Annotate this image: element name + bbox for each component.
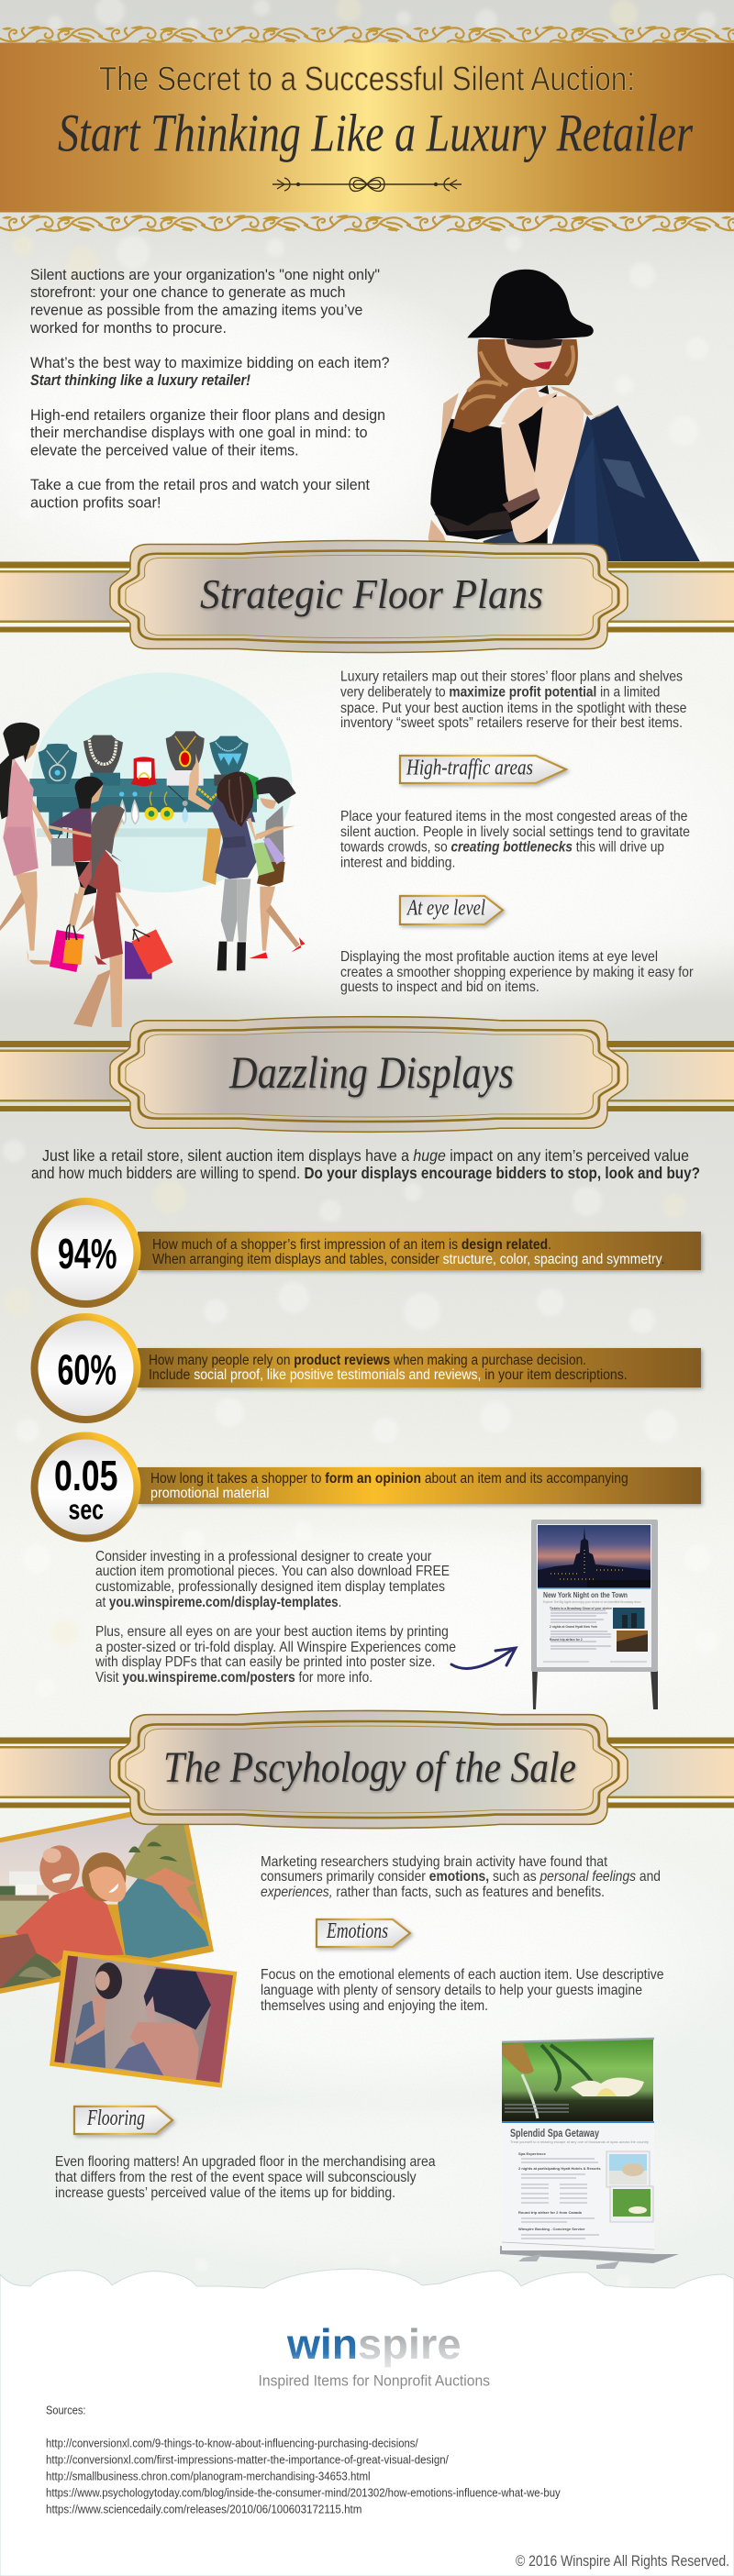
psychology paragraph 2: Focus on the emotional elements of each auction item. Use descriptive [261,1967,664,1983]
flooring paragraph [55,2154,436,2201]
stat: 94%: When arranging item displays and tables, consider structure, color, spacing and symmetry. [152,1252,664,1267]
stat: 60%: 60% [57,1346,117,1394]
retractable banner display: 2 nights at participating Hyatt Hotels & Resorts [518,2166,601,2171]
floor plan paragraph 1 [340,669,687,731]
sources: Sources: [46,2405,85,2417]
tag: High-traffic areas: High-traffic areas [406,756,533,779]
section banner: Strategic Floor Plans [0,541,734,653]
shopper with gray bag [49,777,104,926]
sources: http://smallbusiness.chron.com/planogram-merchandising-34653.html [46,2470,371,2482]
poster display sign [531,1520,658,1709]
arrow to poster [451,1648,516,1668]
banner photo: lotus and bamboo [502,2040,654,2122]
flooring paragraph: Even flooring matters! An upgraded floor in the merchandising area [55,2154,436,2170]
shopper in pink dress [0,723,53,965]
poster display sign: Round trip airfare for 2 [550,1638,583,1642]
intro text: Take a cue from the retail pros and watch your silent [30,476,370,493]
floor plan paragraph 3: creates a smoother shopping experience by making it easy for [340,965,694,980]
intro text: revenue as possible from the amazing items you’ve [30,301,362,318]
title line 1: The Secret to a Successful Silent Auction: [99,61,635,98]
floor plan paragraph 3: guests to inspect and bid on items. [340,979,539,995]
necklaces [47,750,69,764]
intro text: auction profits soar! [30,493,161,511]
intro text: their merchandise displays with one goal in mind: to [30,424,367,441]
retractable banner display: Splendid Spa Getaway [510,2128,599,2139]
sources: https://www.psychologytoday.com/blog/inside-the-consumer-mind/201302/how-emotions-influence-what-we-buy [46,2486,561,2499]
sources: http://conversionxl.com/9-things-to-know-about-influencing-purchasing-decisions/ [46,2437,418,2449]
stat: 0.05 sec: promotional material [150,1486,269,1501]
divider flourish [272,178,462,191]
logo: winspire [286,2320,461,2368]
floor plan paragraph 1: space. Put your best auction items in the spotlight with these [340,701,687,716]
teal circle backdrop [32,672,292,892]
floor plan paragraph 1: inventory “sweet spots” retailers reserve for their best items. [340,715,683,731]
poster display sign: 2 nights at Grand Hyatt New York [550,1625,597,1629]
intro text: Start thinking like a luxury retailer! [30,371,250,389]
intro text [29,266,390,511]
stat: 94% [31,1198,701,1308]
lower ornamental border [0,215,734,233]
psychology paragraph 2: language with plenty of sensory details to help your guests imagine [261,1983,642,1998]
tag: At eye level: At eye level [406,897,485,921]
retractable banner display [500,2039,679,2269]
sources [46,2405,561,2515]
retractable banner display: Round trip airfare for 2 from Canada [518,2210,583,2215]
tag: Emotions: Emotions [326,1919,388,1943]
shopper with short dark hair [250,777,306,958]
section banner: The Psychology of the Sale [0,1710,734,1829]
poster photo: city skyline [538,1525,651,1587]
section banner: Dazzling Displays [0,1017,734,1132]
intro text: storefront: your one chance to generate as much [30,283,345,301]
poster display sign: New York Night on the Town [543,1590,628,1599]
tag: Flooring [74,2106,172,2134]
stat: 94%: How much of a shopper’s first impression of an item is design related. [152,1237,551,1253]
tagline: Inspired Items for Nonprofit Auctions [259,2372,490,2390]
displays body text: customizable, professionally designed item display templates [95,1579,445,1595]
top ornamental border [0,26,734,44]
displays body text: Visit you.winspireme.com/posters for more info. [95,1670,373,1686]
shopper in red dress with bags [50,805,172,1027]
section heading: Strategic Floor Plans [200,570,543,617]
intro text: Silent auctions are your organization's "one night only" [30,266,380,283]
sources: https://www.sciencedaily.com/releases/2010/06/100603172115.htm [46,2503,361,2515]
retractable banner display: Winspire Booking - Concierge Service [518,2227,585,2231]
floor plan paragraph 1: Luxury retailers map out their stores’ floor plans and shelves [340,669,683,684]
logo: winspire: win [286,2320,358,2368]
psychology paragraph 1: Marketing researchers studying brain activity have found that [261,1854,607,1870]
intro text: worked for months to procure. [29,319,227,337]
retractable banner display: Spa Experience [518,2151,547,2156]
displays body text [95,1549,456,1686]
displays body text: auction item promotional pieces. You can also download FREE [95,1564,450,1579]
stat: 0.05 sec: 0.05 [54,1452,117,1499]
photo: woman in black hat with shopping bag [428,270,700,561]
header banner [0,42,734,213]
poster display sign: Explore The Big Apple and enjoy your choice of an incredible Broadway show. [543,1600,641,1604]
floor plan paragraph 3: Displaying the most profitable auction items at eye level [340,949,658,965]
intro text: High-end retailers organize their floor plans and design [30,406,385,424]
logo: winspire: spire [358,2320,461,2368]
displays body text: at you.winspireme.com/display-templates. [95,1595,341,1610]
earrings [120,801,139,824]
floor plan paragraph 2 [340,809,690,871]
displays body text: a poster-sized or tri-fold display. All Winspire Experiences come [95,1640,456,1655]
stat: 94%: 94% [58,1230,117,1277]
displays intro [31,1146,700,1182]
ring box [131,757,157,787]
displays body text: with display PDFs that can easily be printed into poster size. [95,1654,435,1670]
flooring paragraph: increase guests’ perceived value of the items up for bidding. [55,2185,395,2201]
stat: 0.05 sec: sec [68,1493,104,1526]
floor plan paragraph 2: interest and bidding. [340,855,455,871]
section heading: The Pscyhology of the Sale [163,1743,576,1792]
sources: http://conversionxl.com/first-impressions-matter-the-importance-of-great-visual-design/ [46,2453,449,2466]
flooring paragraph: that differs from the rest of the event space will subconsciously [55,2170,417,2185]
floor plan paragraph 2: towards crowds, so creating bottlenecks this will drive up [340,840,664,856]
poster display sign: Tickets to a Broadway Show of your choice [550,1607,612,1610]
tag: Flooring: Flooring [86,2106,145,2130]
footer panel with scalloped edge [0,2269,734,2576]
displays body text: Consider investing in a professional designer to create your [95,1549,432,1564]
stat: 60%: Include social proof, like positive testimonials and reviews, in your item descriptions. [149,1367,628,1383]
section heading: Dazzling Displays [228,1046,514,1098]
stat: 60% [31,1313,701,1423]
psychology paragraph 1: experiences, rather than facts, such as features and benefits. [261,1885,605,1900]
stat: 0.05 sec: How long it takes a shopper to form an opinion about an item and its accompanying [150,1471,628,1487]
displays intro: Just like a retail store, silent auction item displays have a huge impact on any item’s perceived value [42,1146,689,1165]
floor plan paragraph 2: silent auction. People in lively social settings tend to gravitate [340,824,690,840]
floor plan paragraph 2: Place your featured items in the most congested areas of the [340,809,688,824]
shopper in blue dress [188,754,275,970]
floor plan paragraph 1: very deliberately to maximize profit potential in a limited [340,684,660,701]
psychology paragraph 2: themselves using and enjoying the item. [261,1998,488,2014]
psychology paragraph 2 [261,1967,664,2014]
illustration: shoppers at jewelry counter [0,672,306,1027]
photo: smiling couple selfie [0,1801,214,1994]
jewelry counter [29,731,259,835]
retractable banner display: Treat yourself to a relaxing escape at any one of thousands of spas across the country [510,2139,649,2144]
photo: woman in mirror [50,1951,237,2088]
psychology paragraph 1: consumers primarily consider emotions, such as personal feelings and [261,1869,661,1885]
stat: 60%: How many people rely on product reviews when making a purchase decision. [149,1353,586,1368]
intro text: What’s the best way to maximize bidding on each item? [30,354,389,371]
stat: 0.05 sec [31,1432,701,1542]
intro text: elevate the perceived value of their items. [30,441,299,459]
displays body text: Plus, ensure all eyes on are your best auction items by printing [95,1624,449,1640]
psychology paragraph 1 [261,1854,661,1900]
floor plan paragraph 3 [340,949,694,995]
